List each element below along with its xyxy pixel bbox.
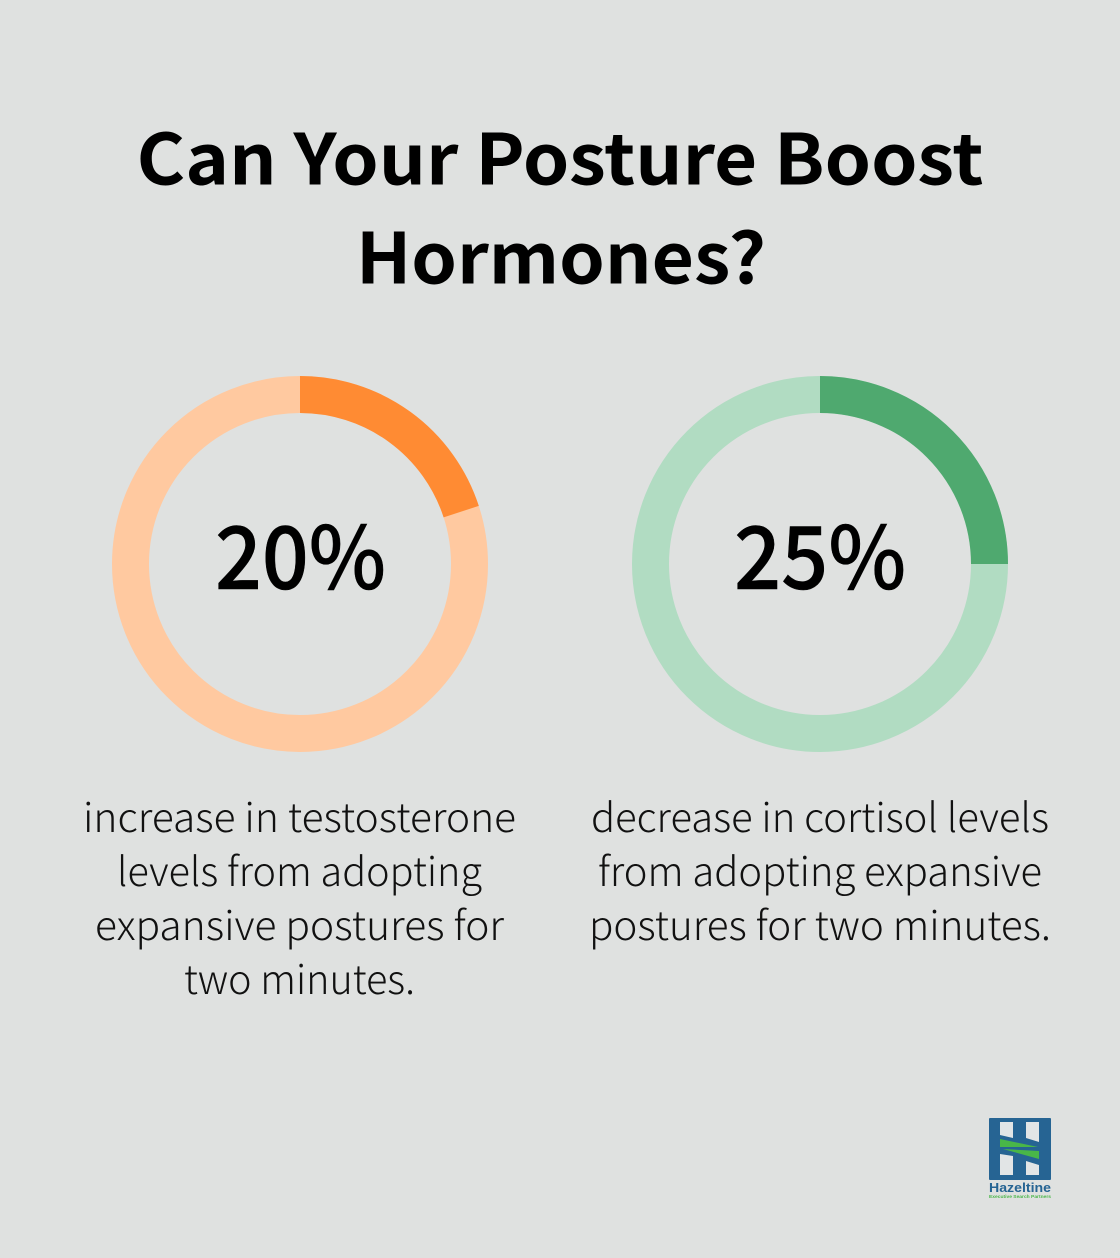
description: testosterone: two minutes. — [184, 948, 415, 1006]
donut chart: 25% — [650, 394, 990, 734]
logo tagline: Executive Search Partners — [989, 1194, 1052, 1199]
title — [136, 104, 984, 304]
panel: testosterone stat — [83, 394, 516, 1006]
description: testosterone — [83, 786, 516, 1006]
logo wordmark: Hazeltine — [989, 1180, 1051, 1195]
description: testosterone: expansive postures for — [95, 894, 505, 952]
description: cortisol: decrease in cortisol levels — [591, 786, 1049, 844]
title: Can Your Posture Boost — [136, 104, 984, 206]
description: cortisol: from adopting expansive — [598, 840, 1042, 898]
description: testosterone: levels from adopting — [117, 840, 482, 898]
donut chart: 20% — [130, 394, 470, 734]
icon: logo mark — [989, 1118, 1051, 1180]
value: 25%: 25% — [734, 489, 906, 615]
description: testosterone: increase in testosterone — [83, 786, 516, 844]
description: cortisol — [589, 786, 1051, 952]
panel: cortisol stat — [589, 394, 1051, 952]
title: Hormones? — [356, 204, 766, 304]
logo: Hazeltine — [989, 1118, 1052, 1199]
description: cortisol: postures for two minutes. — [589, 894, 1051, 952]
value: 20%: 20% — [215, 489, 386, 615]
